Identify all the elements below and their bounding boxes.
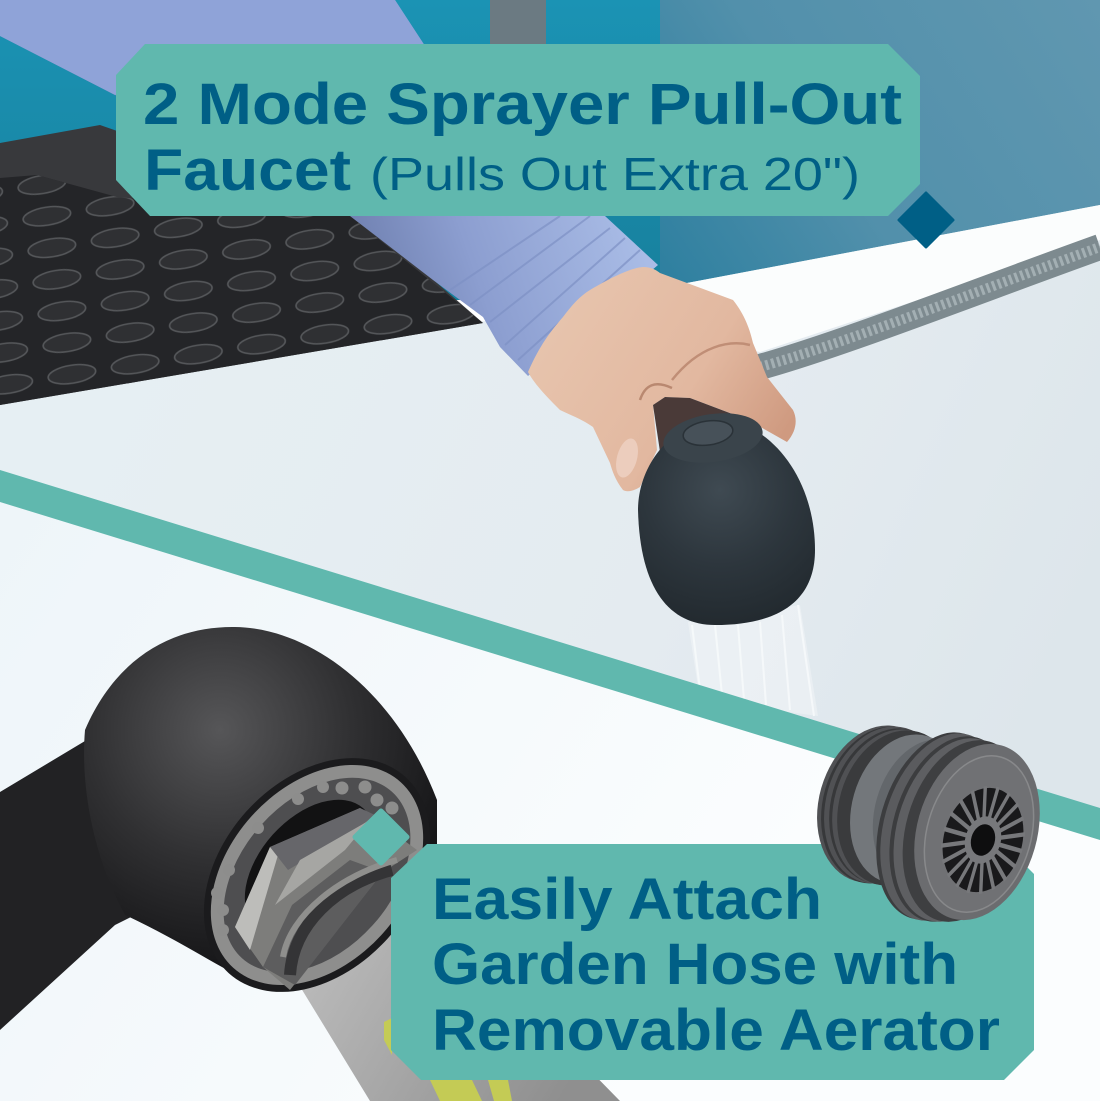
photo: removable aerator bbox=[799, 711, 1059, 936]
aerator neck bbox=[833, 721, 993, 897]
faucet ball bbox=[84, 627, 437, 990]
icon: teal diamond bbox=[355, 811, 407, 863]
outlet ring bbox=[158, 713, 476, 1037]
tub surface bbox=[0, 205, 1100, 820]
adapter collar bbox=[283, 860, 397, 975]
bottom text line 1: Easily Attach bbox=[432, 867, 822, 932]
faucet neck bbox=[0, 738, 135, 1030]
panel: top label bbox=[116, 44, 920, 216]
wall pipe bbox=[490, 0, 546, 46]
heading line 1: 2 Mode Sprayer Pull-Out bbox=[143, 72, 902, 137]
water spray bbox=[688, 605, 818, 716]
sprayer handle bbox=[653, 397, 735, 465]
hose bbox=[760, 247, 1100, 367]
panel: bottom label bbox=[391, 844, 1034, 1080]
sprayer head bbox=[638, 419, 815, 625]
gray hose adapter bbox=[293, 868, 620, 1101]
tub front bbox=[0, 323, 820, 720]
photo: faucet head with hose attachment bbox=[0, 627, 620, 1101]
aerator front threads bbox=[856, 718, 1045, 936]
heading note: (Pulls Out Extra 20") bbox=[370, 148, 860, 200]
wall: teal left bbox=[0, 0, 660, 300]
heading line 2: Faucet bbox=[144, 138, 351, 203]
sprayer cap bbox=[660, 407, 766, 469]
sleeve bbox=[0, 0, 658, 376]
yellow label bbox=[384, 1018, 512, 1101]
teal diagonal stripe bbox=[0, 470, 1100, 840]
brass fitting bbox=[235, 808, 417, 990]
callout: top heading bbox=[116, 44, 920, 216]
callout: bottom heading bbox=[391, 844, 1034, 1080]
hand bbox=[528, 267, 796, 491]
tub rim highlight bbox=[687, 205, 1100, 352]
photo: sprayer in use, tub background bbox=[0, 0, 1100, 820]
bottom text line 3: Removable Aerator bbox=[432, 998, 1000, 1063]
nozzle beads bbox=[211, 780, 398, 936]
aerator face bbox=[895, 729, 1059, 935]
dark mat bbox=[0, 125, 483, 405]
icon: dark blue diamond bbox=[899, 193, 953, 247]
lower white area bbox=[0, 502, 1100, 1101]
bottom text line 2: Garden Hose with bbox=[432, 932, 958, 997]
wall: blue right bbox=[660, 0, 1100, 290]
aerator rear threads bbox=[799, 711, 975, 900]
aerator vents bbox=[929, 776, 1037, 904]
